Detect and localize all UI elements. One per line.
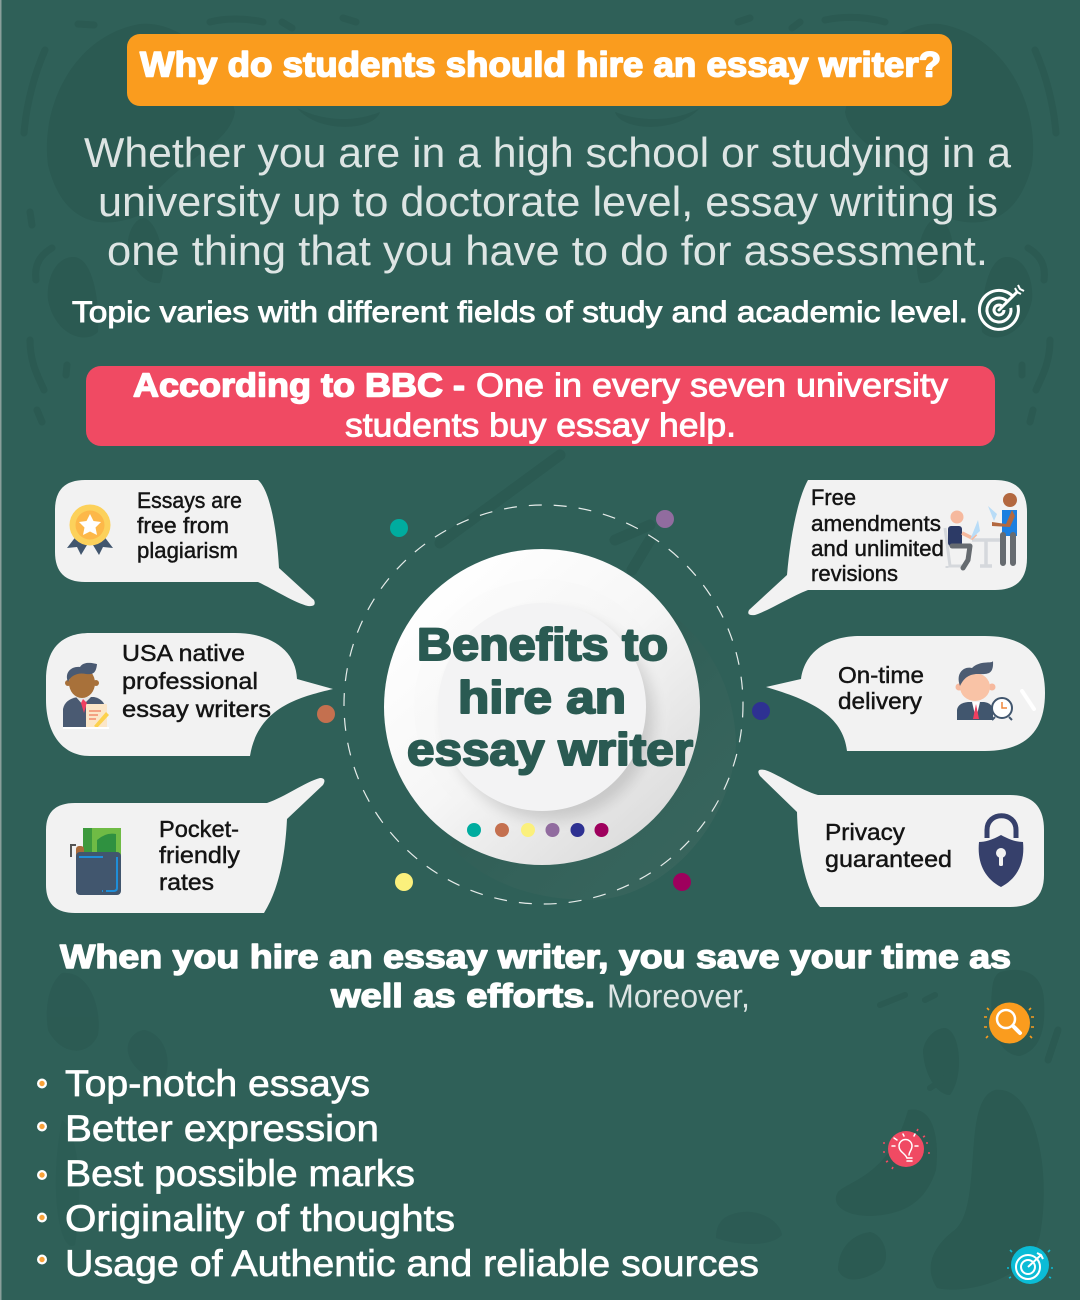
inner disc [438,603,646,811]
orbit dot: navy [752,702,770,720]
benefits bullet list [37,1063,759,1284]
closing statement: When you hire an essay writer, you save your time as [60,938,1011,975]
icon: medal [67,504,113,555]
callout: free amendments: amendments [811,511,941,536]
callout: USA native writers [46,633,333,756]
intro text block: Whether you are in a high school or studying in a [84,129,1012,176]
callout: free amendments [748,480,1027,615]
callout: pocket-friendly rates: rates [159,869,214,895]
callout: pocket-friendly rates [46,778,324,913]
icon: target badge [1007,1246,1053,1284]
icon: two people at a table [945,493,1017,568]
callout: pocket-friendly rates: friendly [159,842,241,868]
colour dots row [467,823,608,837]
subheading: topic varies: Topic varies with different fields of study and academic level. [72,296,968,329]
orbit dot: maroon [673,873,691,891]
center heading: Benefits to [417,619,668,670]
callout: privacy guaranteed [758,770,1044,907]
callout: free amendments: Free [811,485,856,510]
center heading: essay writer [407,724,693,775]
outer plate [384,549,700,865]
central diagram: benefits to hire an essay writer [317,505,770,904]
closing statement: well as efforts. [330,977,595,1014]
callout: free from plagiarism: free from [137,513,229,538]
closing statement [60,938,1011,1014]
bullet item: best possible marks: Best possible marks [65,1153,415,1194]
callout: free from plagiarism: plagiarism [137,538,238,563]
callout: on-time delivery: On-time [838,662,924,688]
closing statement: Moreover, [607,978,750,1014]
center heading [407,619,693,775]
callout: free amendments: and unlimited [811,536,944,561]
icon: man with clock [956,661,1034,720]
intro text block [84,129,1012,274]
bullet item: top-notch essays: Top-notch essays [65,1063,370,1104]
statistic banner: BBC: According to BBC - [133,366,465,404]
title banner [127,34,952,106]
inner disc shadow [446,612,654,820]
callout: free amendments: revisions [811,561,898,586]
icon: magnifier badge [984,1002,1034,1044]
icon: writer with paper [63,663,109,729]
callout: USA native writers: USA native [122,640,245,666]
bullet item: originality of thoughts: Originality of thoughts [65,1198,455,1239]
callout: on-time delivery [766,636,1045,751]
center heading: hire an [458,672,626,723]
callout: pocket-friendly rates: Pocket- [159,816,239,842]
statistic banner: BBC: One in every seven university [476,366,949,404]
statistic banner: BBC [86,366,995,446]
title banner: Why do students should hire an essay writer? [140,46,941,84]
orbit dot: yellow [395,873,413,891]
intro text block: university up to doctorate level, essay writing is [98,178,998,225]
icon: light bulb badge [883,1129,930,1169]
plate long shadow [450,600,736,900]
orbit dot: teal [390,519,408,537]
callout: USA native writers: professional [122,668,258,694]
callout: USA native writers: essay writers [122,696,271,722]
middle ring [414,579,670,835]
intro text block: one thing that you have to do for assessment. [107,227,988,274]
callout: on-time delivery: delivery [838,688,923,714]
decorative dashed orbit [344,505,743,904]
callout: free from plagiarism [55,480,315,606]
orbit dot: purple [656,510,674,528]
orbit dot: brown [317,705,335,723]
icon: target with arrow [979,285,1024,329]
callout: free from plagiarism: Essays are [137,488,242,513]
icon: wallet with cash [71,828,121,895]
statistic banner: BBC: students buy essay help. [345,406,736,444]
callout: privacy guaranteed: guaranteed [825,846,952,872]
callout: privacy guaranteed: Privacy [825,819,906,845]
bullet item: better expression: Better expression [65,1108,379,1149]
bullet item: authentic sources: Usage of Authentic and reliable sources [65,1243,759,1284]
icon: padlock shield [979,816,1023,887]
